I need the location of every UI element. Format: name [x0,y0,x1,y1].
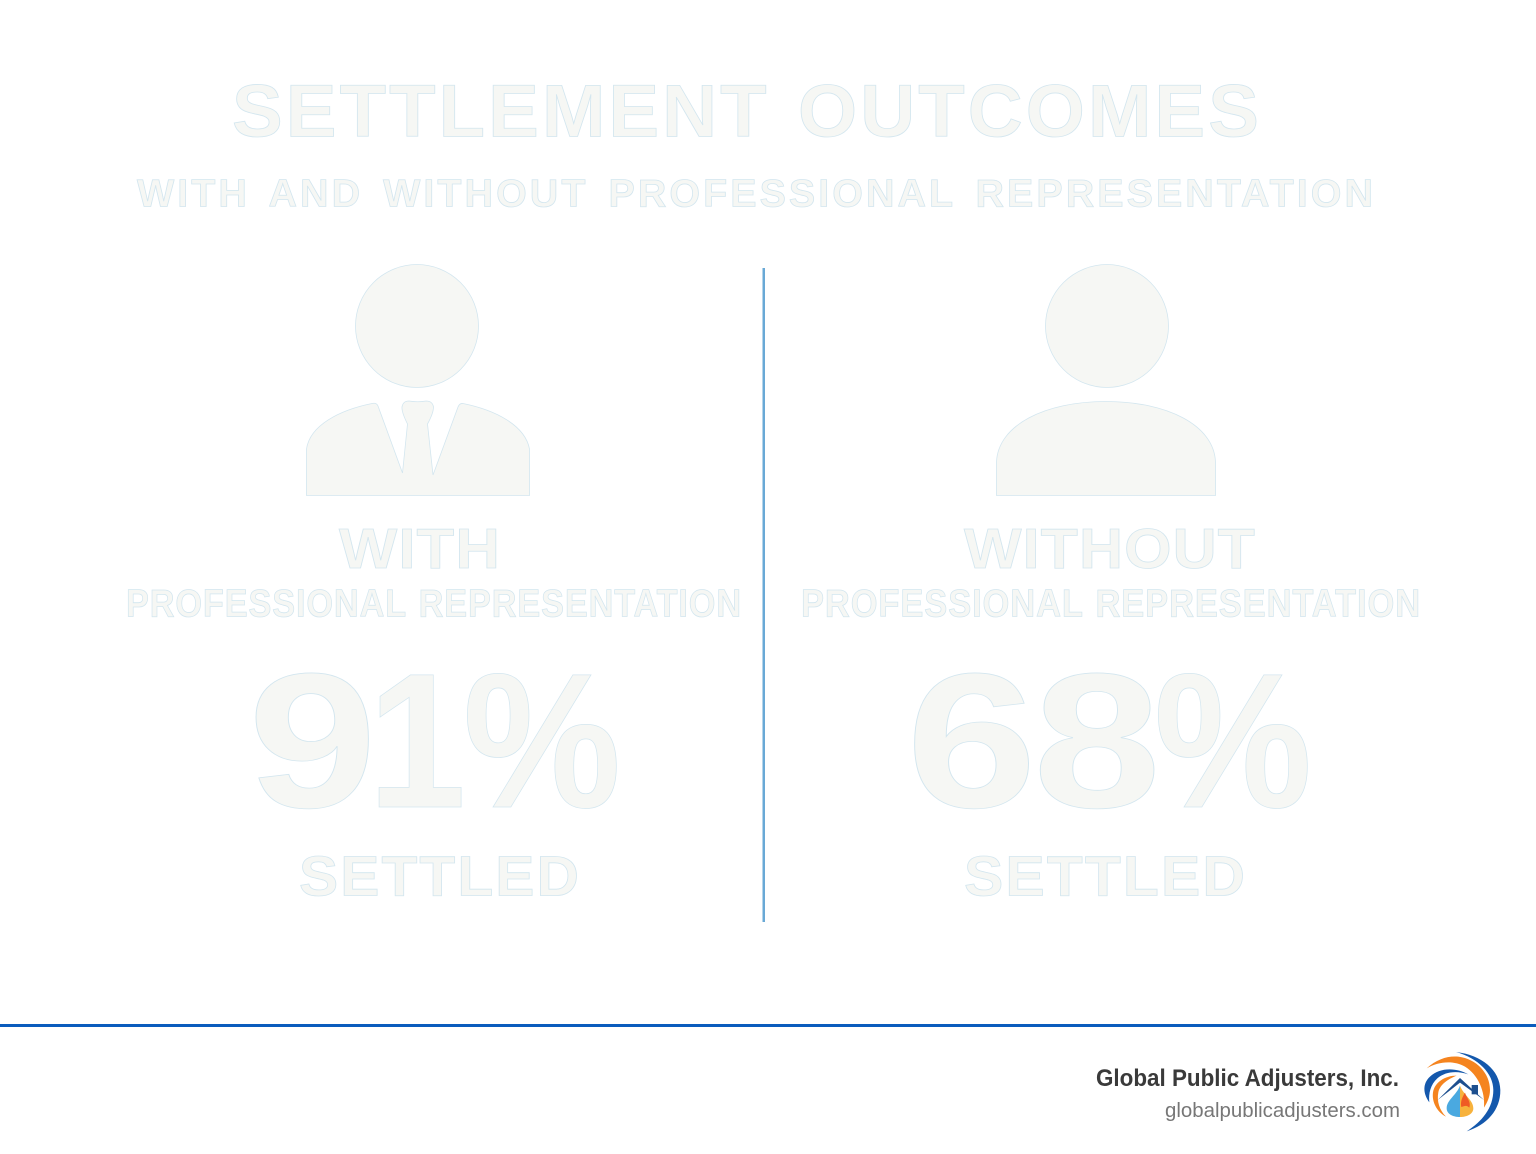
label: professional representation: PROFESSIONAL REPRESENTATION [801,582,1421,626]
stat: 91%: 9 [248,633,377,848]
panel: without professional representation [801,264,1421,908]
label: professional representation: PROFESSIONAL REPRESENTATION [126,582,742,626]
label: with: WITH [339,517,501,581]
divider [762,268,765,922]
label: without: WITHOUT [964,517,1256,581]
company name: Global Public Adjusters, Inc. [1096,1065,1399,1092]
icon: logo [1424,1052,1500,1131]
label: settled: SETTLED [964,844,1247,908]
stat: 91%: 1 [368,633,466,848]
panel: with professional representation [126,264,742,908]
stat: 68% [906,633,1312,848]
website: globalpublicadjusters.com [1165,1100,1400,1122]
stat: 91%: % [463,633,621,848]
stat: 68%: 6 [906,633,1037,848]
stat: 91% [248,633,621,848]
title: SETTLEMENT OUTCOMES [232,70,1262,152]
subtitle: WITH AND WITHOUT PROFESSIONAL REPRESENTATION [137,172,1376,216]
stat: 68%: 8 [1033,633,1161,848]
icon: person [996,264,1216,496]
footer rule [0,1024,1536,1027]
stat: 68%: % [1154,633,1312,848]
icon: person in suit and tie [306,264,530,496]
label: settled: SETTLED [299,844,581,908]
footer [1096,1052,1500,1131]
